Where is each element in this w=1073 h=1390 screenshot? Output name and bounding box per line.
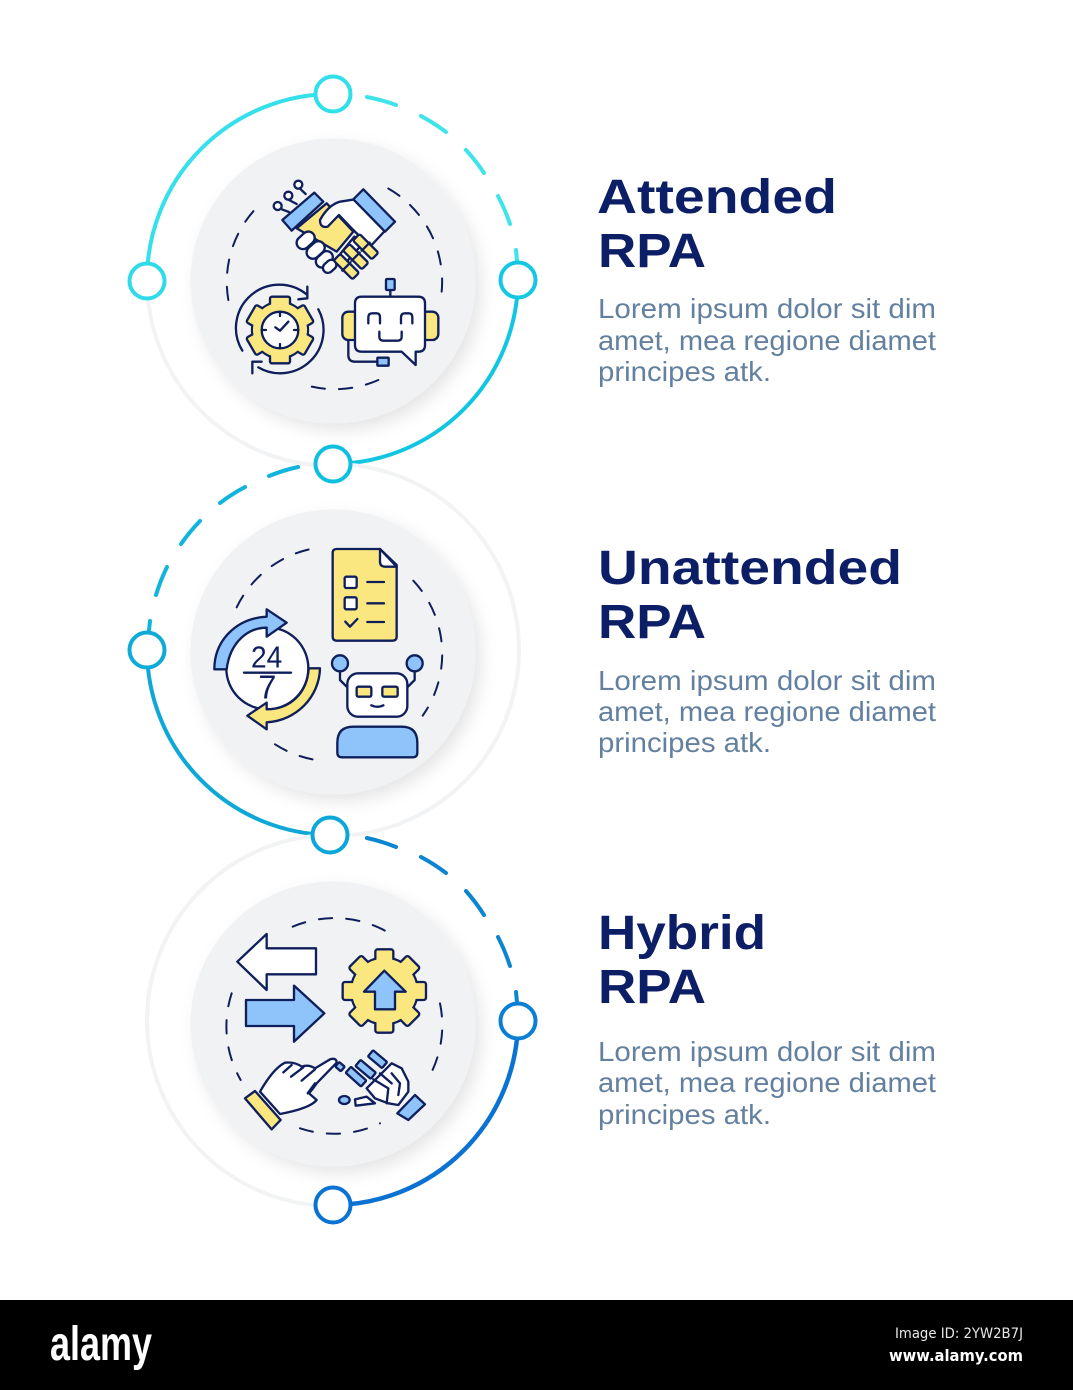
icon: gear with up arrow xyxy=(343,949,426,1033)
heading: Unattended RPA xyxy=(598,542,902,649)
heading: Hybrid RPA: Hybrid xyxy=(598,907,766,960)
heading: Hybrid RPA: RPA xyxy=(598,961,706,1014)
ring: hybrid xyxy=(147,835,518,1206)
dashed orbit xyxy=(226,918,442,1134)
text: Hybrid description: amet, mea regione diamet xyxy=(598,1067,936,1098)
footer logo: alamy xyxy=(50,1318,152,1371)
heading: Unattended RPA: Unattended xyxy=(598,542,902,595)
text: Unattended description: amet, mea regione diamet xyxy=(598,696,936,727)
icon: 24/7 clock xyxy=(214,609,320,729)
text: Attended description: amet, mea regione diamet xyxy=(598,325,936,356)
heading: Unattended RPA: RPA xyxy=(598,596,706,649)
text: Attended description xyxy=(598,293,936,387)
icon: 24/7 clock: 24 xyxy=(251,640,282,674)
icon: handshake xyxy=(274,181,395,279)
icon: blue right arrow xyxy=(246,986,324,1042)
icon: human hand xyxy=(245,1059,337,1129)
heading: Attended RPA: RPA xyxy=(598,225,706,278)
icon: checklist document xyxy=(333,549,397,641)
footer url: www.alamy.com xyxy=(889,1346,1023,1365)
text: Attended description: Lorem ipsum dolor sit dim xyxy=(598,293,936,324)
disc: unattended xyxy=(190,510,476,794)
dashed orbit xyxy=(237,548,442,761)
icon: robot xyxy=(332,655,423,757)
icon: robot hand xyxy=(335,1050,425,1120)
icon group: attended xyxy=(227,181,442,389)
ring: attended xyxy=(147,94,518,466)
text: Unattended description xyxy=(598,665,936,758)
disc: hybrid xyxy=(190,882,476,1166)
heading: Attended RPA xyxy=(597,171,837,278)
text: Hybrid description xyxy=(598,1036,936,1130)
text: Unattended description: principes atk. xyxy=(598,727,771,758)
text: Attended description: principes atk. xyxy=(598,356,771,387)
ring: unattended xyxy=(147,464,519,836)
dashed orbit xyxy=(227,187,442,389)
footer image id: Image ID: 2YW2B7J xyxy=(895,1326,1023,1342)
heading: Attended RPA: Attended xyxy=(597,171,837,224)
ring nodes xyxy=(130,76,536,1222)
icon group: unattended xyxy=(214,548,442,761)
disc: attended xyxy=(190,138,476,424)
text: Hybrid description: principes atk. xyxy=(598,1099,771,1130)
text: Hybrid description: Lorem ipsum dolor sit dim xyxy=(598,1036,936,1067)
icon: chatbot xyxy=(342,279,438,366)
icon group: hybrid xyxy=(226,918,442,1134)
icon: gear with clock xyxy=(236,285,324,373)
footer bar xyxy=(0,1300,1073,1390)
icon: white left arrow xyxy=(237,934,316,990)
text: Unattended description: Lorem ipsum dolor sit dim xyxy=(598,665,936,696)
icon: 24/7 clock: 7 xyxy=(258,669,276,706)
heading: Hybrid RPA xyxy=(598,907,766,1014)
